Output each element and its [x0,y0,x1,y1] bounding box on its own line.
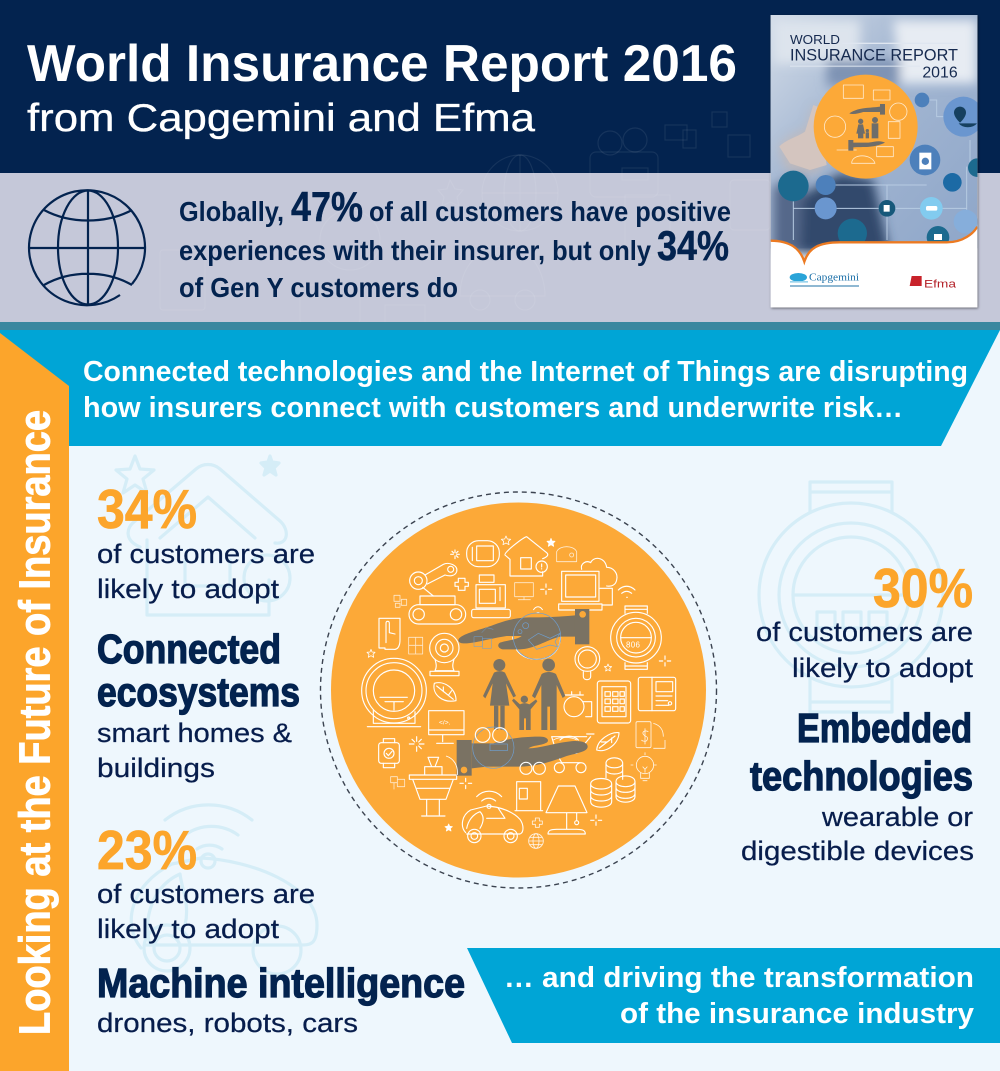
icon: network nodes [391,777,405,789]
title: World Insurance Report 2016 [27,35,737,93]
banner: driving the transformation: of the insurance industry [620,998,974,1030]
icon: desktop code screen: </>. [439,719,451,726]
cover network icons [778,93,987,249]
icon: sparks [409,550,671,825]
callout: connected ecosystems: buildings [97,753,215,783]
callout: machine intelligence: drones, robots, cars [97,1008,358,1038]
icon: small plus and globe [529,818,543,848]
cover photo: suited figure [773,20,977,253]
callout: connected ecosystems: likely to adopt [97,574,280,604]
sidebar: looking at the future of insurance: Looking at the Future of Insurance [10,410,60,1035]
icon: handbag device [557,547,577,562]
icon: globe [29,190,146,305]
icon: light bulb [631,752,657,781]
callout: machine intelligence: likely to adopt [97,914,280,944]
cover photo: pointing finger [780,107,826,173]
callout: machine intelligence [97,819,465,1038]
icon: connected car [462,791,523,843]
icon: mri scanner [362,658,426,727]
icon: laptop and cloud [559,558,617,610]
efma logo: Efma [924,278,957,290]
capgemini logo [790,272,859,287]
icon: phone [638,677,676,711]
icon: smartwatch [611,606,661,669]
icon: tablet device [467,541,499,567]
efma logo [910,276,957,290]
cover title [790,33,958,81]
header panel [0,0,1000,173]
statistic text [179,183,731,303]
icon: payment phone [636,722,665,748]
cover white footer [771,227,977,310]
callout: machine intelligence: 23% [97,819,197,881]
callout: embedded technologies: wearable or [821,802,973,832]
icon: fish bowl [513,607,561,659]
icon: door panel [515,782,543,811]
ghost icon: connected car [131,805,317,974]
callout: connected ecosystems: of customers are [97,539,315,569]
title [27,35,737,140]
cover orange swoosh [771,227,977,262]
banner: connected technologies: how insurers connect with customers and underwrite risk… [83,392,903,424]
icon: stars [367,536,612,831]
cover emblem [814,75,918,179]
icon: plus [455,578,468,590]
icon: database [591,758,635,807]
ghost icon: smartwatch [759,482,943,712]
banner: driving the transformation [467,948,1000,1043]
callout: embedded technologies: 30% [873,557,973,619]
sidebar: looking at the future of insurance [0,333,69,1071]
icon: webcam [430,633,459,676]
icon: panel and network [394,595,423,654]
callout: connected ecosystems: Connected [97,626,281,672]
cover title: 2016 [922,64,958,81]
statistic text: Globally, [179,196,284,227]
callout: embedded technologies: of customers are [756,617,973,647]
banner: connected technologies: Connected technologies and the Internet of Things are disrupting [83,356,968,388]
icon: wifi [618,586,635,597]
icon: control tower desk [409,757,457,816]
callout: machine intelligence: Machine intelligence [97,960,465,1006]
icon: robot arm [409,563,466,624]
banner: driving the transformation: … and driving the transformation [504,962,974,994]
icon: tablet [597,681,631,723]
statistic text: of Gen Y customers do [179,272,458,303]
callout: connected ecosystems: smart homes & [97,718,292,748]
report cover [771,15,987,310]
icon: lower hand [446,727,588,776]
icon: family [483,659,565,730]
cover connecting lines [793,100,970,240]
cover title: WORLD [790,33,840,47]
icon: watch with check [379,739,399,768]
statistic text: 47% [291,183,363,230]
icon: shopping cart [552,734,594,773]
callout: embedded technologies [741,557,974,866]
callout: embedded technologies: technologies [750,753,973,799]
statistic text: of all customers have positive [369,196,731,227]
icon: magnifier [575,647,600,680]
icon: smartwatch: 806 [626,640,641,649]
icon: upper hand [458,609,589,659]
callout: connected ecosystems: 34% [97,478,197,540]
callout: machine intelligence: of customers are [97,879,315,909]
cover title: INSURANCE REPORT [790,46,958,65]
icon: touch screen [379,618,400,649]
central emblem [320,492,716,888]
statistic text: experiences with their insurer, but only [179,235,652,266]
title: from Capgemini and Efma [27,97,536,140]
callout: connected ecosystems [97,478,315,783]
statistic panel [0,173,1000,322]
icon: cash register [472,575,510,618]
icon: lamp [546,786,587,834]
icon: desktop code screen [429,711,464,743]
statistic text: 34% [657,222,729,269]
icon: monitor [515,583,533,600]
callout: connected ecosystems: ecosystems [97,669,300,715]
callout: embedded technologies: likely to adopt [792,653,974,683]
teal separator [0,322,1000,330]
capgemini logo: Capgemini [809,272,859,284]
ghost icon: house [116,456,290,615]
icon: house [505,537,548,576]
icon: cctv [564,692,592,717]
banner: connected technologies [0,330,1000,446]
icon: leaf [434,683,619,751]
background pattern: faint device icons in header [160,112,770,325]
callout: embedded technologies: digestible devices [741,836,974,866]
